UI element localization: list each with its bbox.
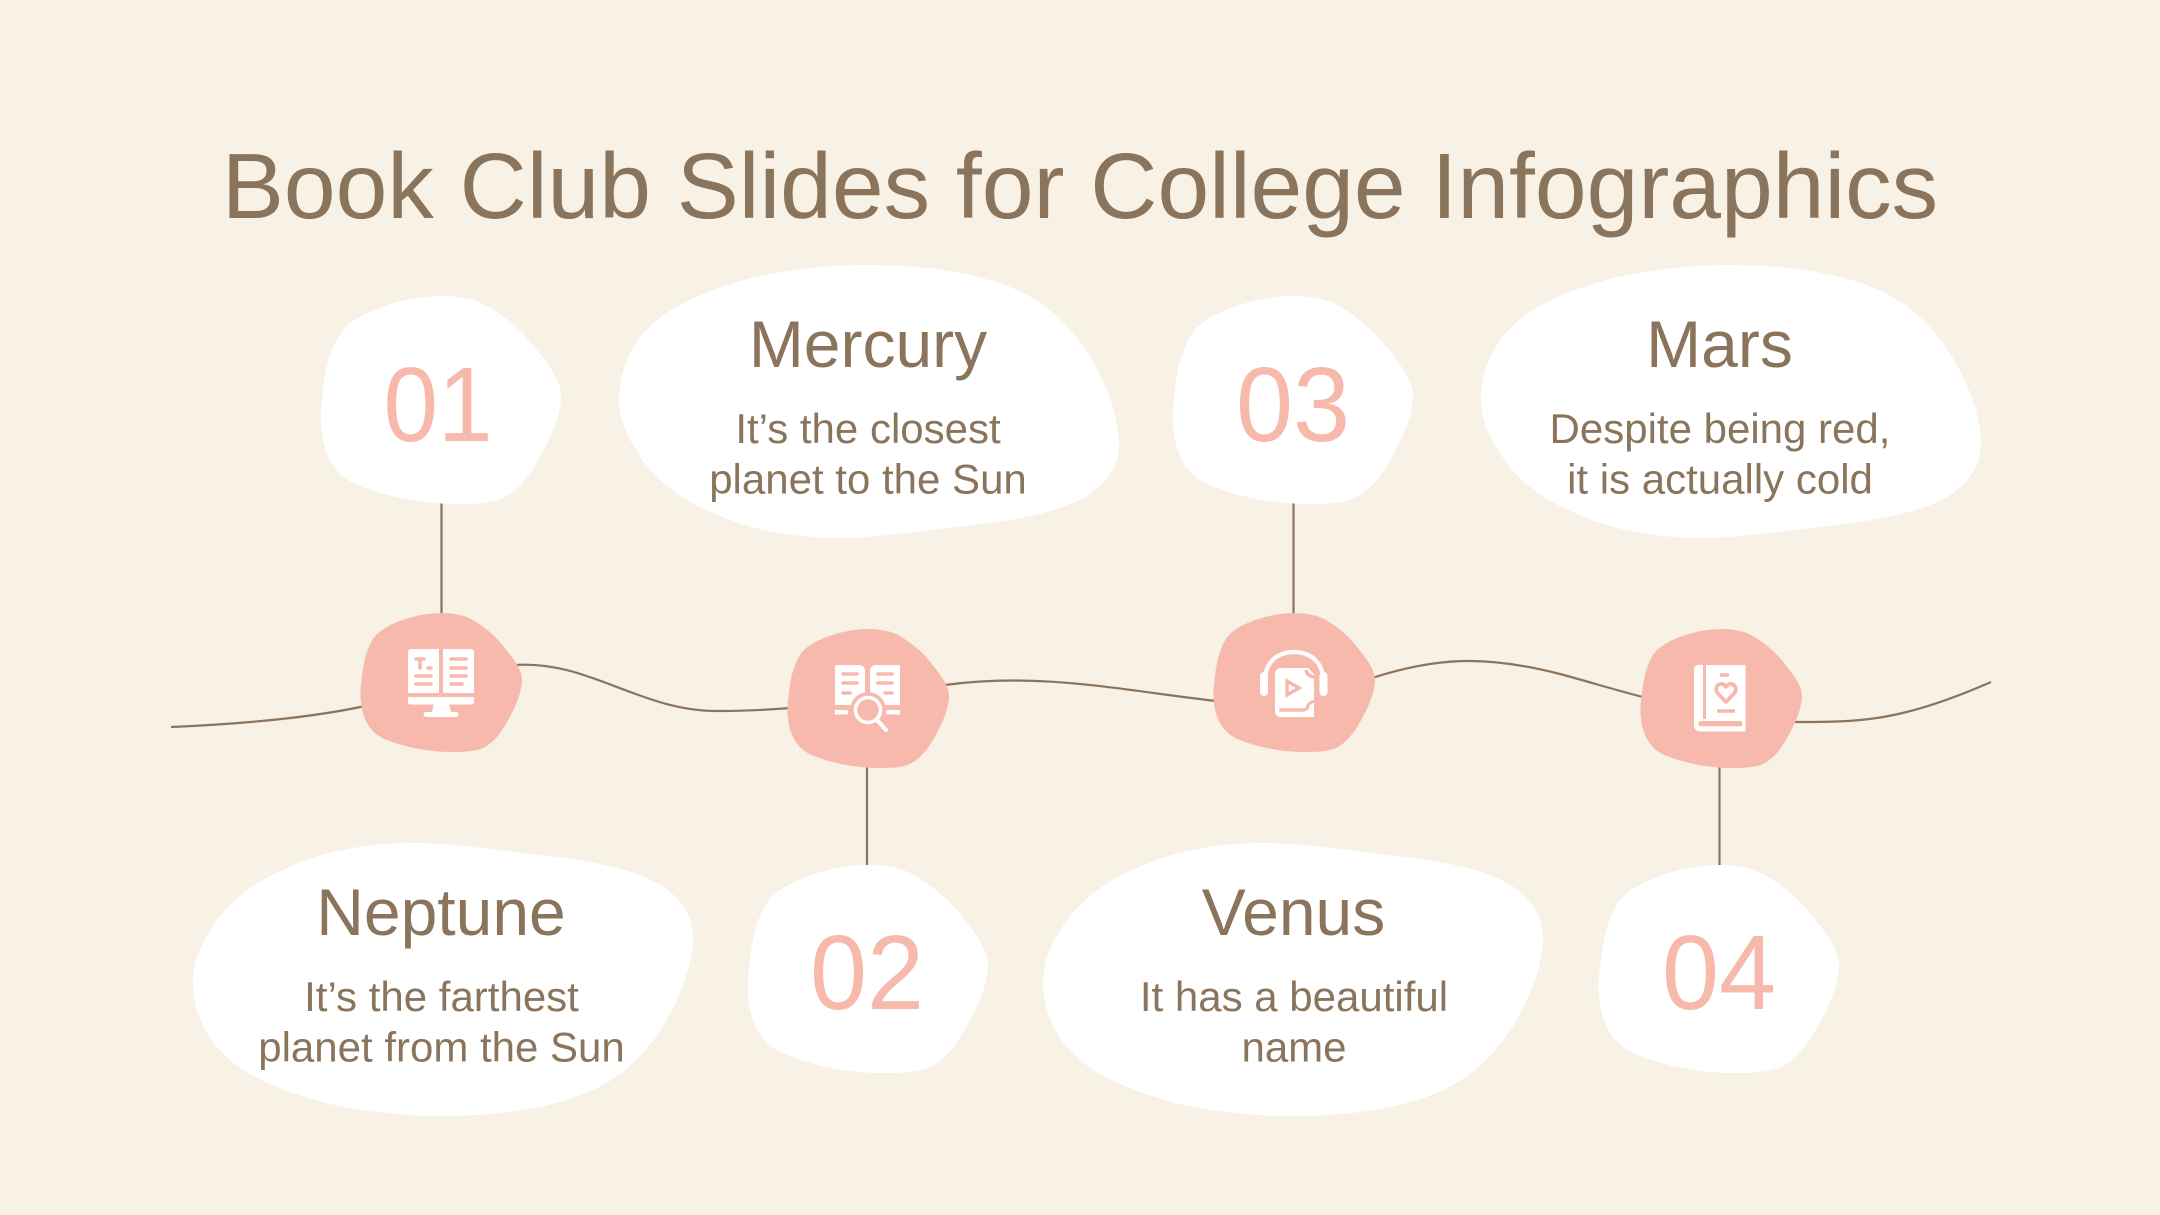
panel: Neptune: Neptune xyxy=(316,875,566,949)
panel: number 04 xyxy=(1599,865,1839,1073)
icon: audiobook with headphones xyxy=(1213,613,1375,752)
icon: book with heart xyxy=(1640,629,1802,768)
panel: Venus: Venus xyxy=(1202,875,1385,949)
panel: Mercury: Mercury xyxy=(749,307,987,381)
icon: book with magnifier xyxy=(787,629,949,768)
panel: Mars: Despite being red, xyxy=(1550,405,1890,452)
icon: book on monitor xyxy=(360,613,522,752)
wavy timeline line xyxy=(171,661,1991,727)
panel: Venus: It has a beautiful xyxy=(1140,973,1448,1020)
panel: Mercury: It’s the closest xyxy=(735,405,1001,452)
panel: number 01 xyxy=(321,296,561,504)
panel: Mars: it is actually cold xyxy=(1567,456,1873,502)
panel: number 01: 01 xyxy=(384,346,492,464)
panel: Venus: name xyxy=(1241,1024,1347,1070)
panel: number 02: 02 xyxy=(810,914,924,1032)
panel: Venus xyxy=(1043,843,1543,1116)
title: Book Club Slides for College Infographics xyxy=(222,134,1938,238)
panel: Mercury: planet to the Sun xyxy=(709,456,1027,502)
panel: Mercury xyxy=(619,265,1119,538)
panel: Neptune: It’s the farthest xyxy=(304,973,579,1020)
panel: number 03: 03 xyxy=(1236,346,1350,464)
connector lines xyxy=(442,503,1720,866)
panel: Neptune: planet from the Sun xyxy=(258,1024,625,1070)
panel: number 02 xyxy=(748,865,988,1073)
panel: number 03 xyxy=(1173,296,1413,504)
panel: Mars xyxy=(1481,265,1981,538)
panel: Mars: Mars xyxy=(1646,307,1793,381)
panel: number 04: 04 xyxy=(1662,914,1776,1032)
panel: Neptune xyxy=(193,843,693,1116)
